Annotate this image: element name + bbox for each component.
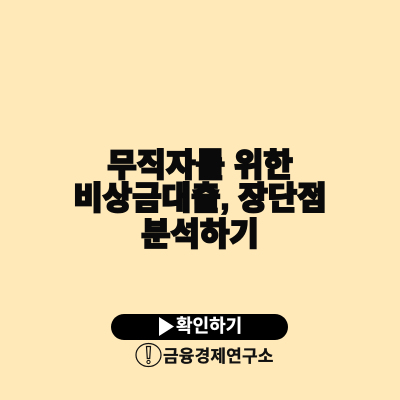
title: 비상금대출, 장단점 <box>73 180 327 216</box>
icon: exclamation circle <box>135 342 162 368</box>
button: confirm <box>111 314 288 340</box>
title <box>73 147 327 252</box>
icon: play triangle <box>159 317 174 336</box>
brand name: 금융경제연구소 <box>163 347 274 366</box>
title: 무직자를 위한 <box>107 147 293 183</box>
button label: 확인하기 <box>176 316 242 336</box>
source: brand <box>135 342 274 368</box>
title: 분석하기 <box>141 216 259 252</box>
